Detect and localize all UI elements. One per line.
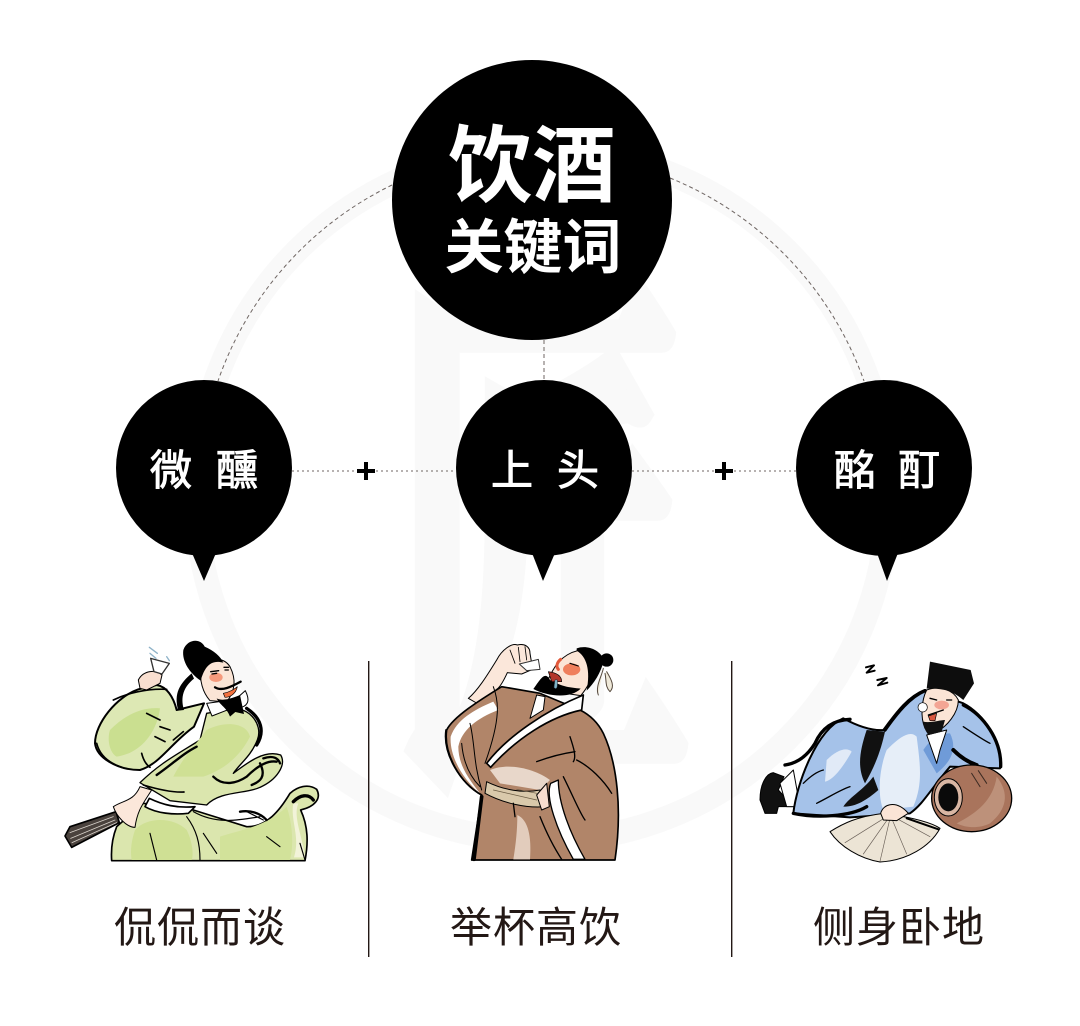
belt xyxy=(485,782,545,807)
plus sign left xyxy=(357,462,375,480)
divider left xyxy=(368,661,369,957)
middle robe and trailing sleeve xyxy=(140,709,282,805)
raised forearm and hand xyxy=(468,645,533,705)
dashed connector arcs xyxy=(218,178,864,381)
hip hand xyxy=(537,783,549,810)
robe dark folds xyxy=(860,730,885,783)
white trouser xyxy=(780,770,800,807)
bubble: 微醺 xyxy=(116,380,292,581)
fan xyxy=(830,813,940,862)
head xyxy=(918,662,974,735)
cup xyxy=(519,659,540,671)
collar xyxy=(927,730,947,763)
lower hand and sash xyxy=(113,787,152,827)
raised hand and cup xyxy=(138,647,169,690)
hand xyxy=(881,805,908,821)
big left sleeve xyxy=(95,685,204,770)
caption: 举杯高饮: 举杯高饮 xyxy=(450,904,622,951)
wine jar xyxy=(932,765,1012,832)
illustration: green robed scholar xyxy=(65,641,318,861)
snore marks xyxy=(866,665,887,685)
head xyxy=(533,647,613,696)
title line 1: 饮酒 xyxy=(448,119,616,213)
illustration: blue robed man lying down xyxy=(760,662,1012,862)
blue robe xyxy=(793,690,1000,817)
divider right xyxy=(731,661,732,957)
fan xyxy=(65,812,119,847)
bubble: 酩酊: 酩酊 xyxy=(834,447,940,494)
robe outline ink xyxy=(785,691,1001,816)
robe xyxy=(446,687,618,860)
caption: 侃侃而谈: 侃侃而谈 xyxy=(114,904,286,951)
plus sign right xyxy=(715,462,733,480)
bubble: 微醺: 微醺 xyxy=(150,447,258,494)
lower robe xyxy=(111,786,318,861)
left sleeve white edge xyxy=(451,702,498,793)
bubble: 上头 xyxy=(456,380,632,581)
title circle xyxy=(392,60,672,340)
robe fold lines xyxy=(513,737,612,859)
watermark character: 匠 xyxy=(392,259,692,856)
head xyxy=(177,641,248,717)
illustration: brown robed man drinking xyxy=(446,645,618,860)
bubble: 酩酊 xyxy=(796,380,972,581)
watermark ring xyxy=(196,149,888,841)
bubble: 上头: 上头 xyxy=(491,447,599,494)
light wash xyxy=(490,767,550,790)
caption: 侧身卧地: 侧身卧地 xyxy=(813,904,985,951)
right sleeve white edge xyxy=(549,780,585,859)
shoe xyxy=(760,773,794,813)
white collar xyxy=(487,695,583,767)
robe light washes xyxy=(880,734,920,810)
dotted connectors xyxy=(292,470,796,472)
title line 2: 关键词 xyxy=(444,215,622,281)
